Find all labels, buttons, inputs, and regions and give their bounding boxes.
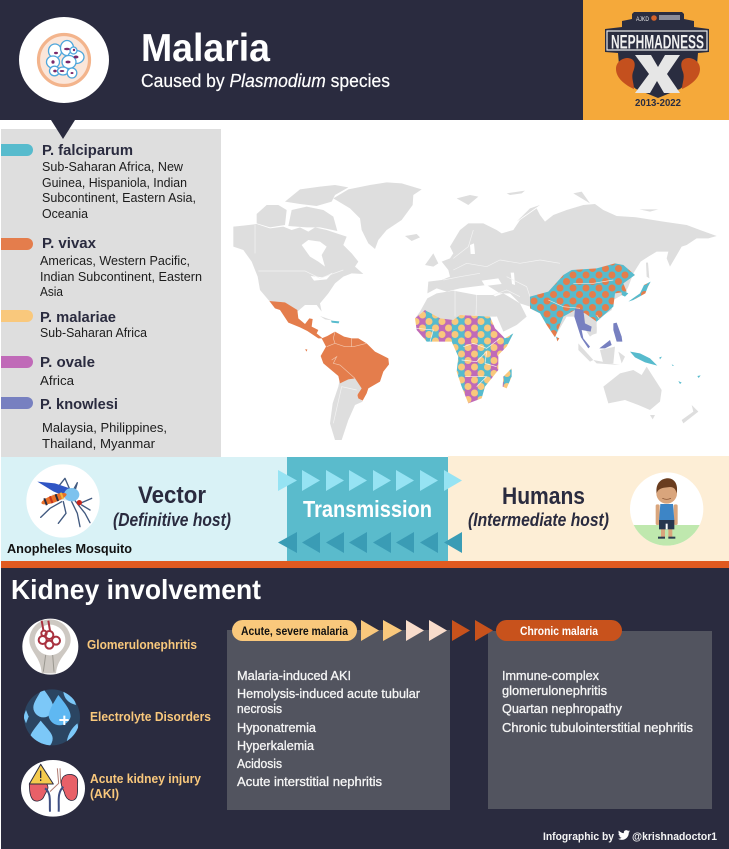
- species: P. knowlesi: P. knowlesi: [40, 396, 118, 413]
- header band: [0, 0, 583, 120]
- arrows: acute to chronic: [361, 620, 493, 641]
- pill: chronic: [496, 620, 622, 641]
- species: P. malariae: [1, 309, 148, 340]
- species: P. vivax: Americas, Western Pacific,: [40, 253, 190, 268]
- species: P. ovale: Africa: [40, 373, 75, 388]
- list: chronic manifestations: Chronic tubulointerstitial nephritis: [502, 720, 693, 735]
- logo panel: NephMadness: [583, 0, 729, 120]
- list: acute manifestations: Hemolysis-induced acute tubular: [237, 686, 421, 701]
- list: acute manifestations: Hyperkalemia: [237, 738, 315, 753]
- icon: kidneys with warning sign: [21, 760, 85, 817]
- heading: Kidney involvement: [11, 574, 261, 605]
- list: acute manifestations: Acute interstitial nephritis: [237, 774, 382, 789]
- list: chronic manifestations: Quartan nephropathy: [502, 701, 622, 716]
- list: chronic manifestations: glomerulonephritis: [502, 683, 607, 698]
- species: P. knowlesi: Thailand, Myanmar: [42, 436, 156, 451]
- species: P. vivax: Asia: [40, 284, 64, 299]
- divider bar: [1, 561, 729, 568]
- logo badge: [605, 12, 709, 109]
- item: electrolyte disorders: [23, 688, 211, 750]
- label: Anopheles Mosquito: Anopheles Mosquito: [7, 541, 132, 556]
- species: P. malariae: Sub-Saharan Africa: [40, 325, 148, 340]
- icon: twitter bird: [618, 830, 630, 840]
- icon: infected blood cells: [19, 17, 109, 103]
- Africa pattern: falciparum, malariae, ovale: [415, 310, 513, 403]
- P. falciparum: Hispaniola, New Guinea, Oceania: [331, 321, 701, 384]
- species: P. knowlesi: Malaysia, Philippines,: [42, 420, 167, 435]
- species: P. falciparum: Guinea, Hispaniola, Indian: [42, 175, 187, 190]
- species: P. falciparum: P. falciparum: [42, 142, 133, 159]
- species: P. knowlesi: [1, 396, 167, 451]
- pill: acute: Acute, severe malaria: [241, 626, 349, 638]
- text: vector: (Definitive host): [113, 510, 231, 530]
- inland water and borders: [255, 225, 560, 423]
- icon: water drops: [24, 690, 80, 746]
- icon: mosquito: [26, 464, 100, 538]
- list: acute manifestations: Acidosis: [237, 756, 282, 771]
- list: acute manifestations: Hyponatremia: [237, 720, 317, 735]
- species: P. ovale: P. ovale: [40, 354, 95, 371]
- list: chronic manifestations: Immune-complex: [502, 668, 599, 683]
- P. knowlesi: Southeast Asia: [574, 308, 622, 348]
- text: vector: Vector: [138, 482, 206, 509]
- panel: acute, severe malaria: [227, 620, 450, 810]
- species: P. falciparum: Oceania: [42, 206, 89, 221]
- title: Malaria: [141, 27, 270, 70]
- heading: transmission: Transmission: [303, 496, 432, 522]
- list: acute manifestations: necrosis: [237, 701, 282, 716]
- species: P. falciparum: [1, 142, 196, 221]
- pointer from header circle: [51, 120, 75, 139]
- panel: species legend: [1, 120, 221, 457]
- text: humans: (Intermediate host): [468, 510, 609, 530]
- subtitle: Caused by Plasmodium species: [141, 70, 390, 91]
- pill: acute: [232, 620, 357, 641]
- text: humans: Humans: [502, 483, 585, 510]
- icon: human figure: [628, 472, 705, 548]
- species: P. vivax: Indian Subcontinent, Eastern: [40, 269, 202, 284]
- panel: chronic malaria: [361, 620, 712, 809]
- text: vector: [113, 482, 231, 530]
- item: acute kidney injury: [21, 760, 202, 817]
- credit: Infographic by: [543, 831, 615, 843]
- species: P. falciparum: Sub-Saharan Africa, New: [42, 159, 184, 174]
- list: acute manifestations: Malaria-induced AKI: [237, 668, 351, 683]
- species: P. malariae: P. malariae: [40, 309, 116, 326]
- label: Glomerulonephritis: [87, 637, 197, 652]
- credit: @krishnadoctor1: [632, 831, 717, 843]
- label: Acute kidney injury: [90, 771, 202, 786]
- credit: [543, 830, 717, 843]
- arrows: humans to vector: [278, 532, 462, 553]
- P. vivax: Americas: [269, 301, 389, 401]
- item: glomerulonephritis: [22, 619, 197, 675]
- logo badge: AJKD: [636, 16, 649, 23]
- list: chronic manifestations: [502, 668, 693, 735]
- label: Electrolyte Disorders: [90, 709, 211, 724]
- list: acute manifestations: [237, 668, 421, 789]
- species: P. vivax: [1, 235, 202, 299]
- species: P. falciparum: Subcontinent, Eastern Asia,: [42, 190, 196, 205]
- panel: kidney involvement: [1, 568, 729, 849]
- Asia pattern: falciparum, vivax: [530, 263, 651, 341]
- species: P. ovale: [1, 354, 95, 388]
- label: [90, 771, 202, 801]
- panel: transmission band: [1, 456, 729, 561]
- logo badge: 2013-2022: [635, 98, 681, 109]
- arrows: vector to humans: [278, 470, 462, 491]
- label: (AKI): [90, 786, 119, 801]
- text: humans: [468, 483, 609, 530]
- pill: chronic: Chronic malaria: [520, 626, 599, 638]
- species: P. vivax: P. vivax: [42, 235, 97, 252]
- icon: glomerulus: [22, 619, 78, 675]
- world map: [233, 182, 717, 440]
